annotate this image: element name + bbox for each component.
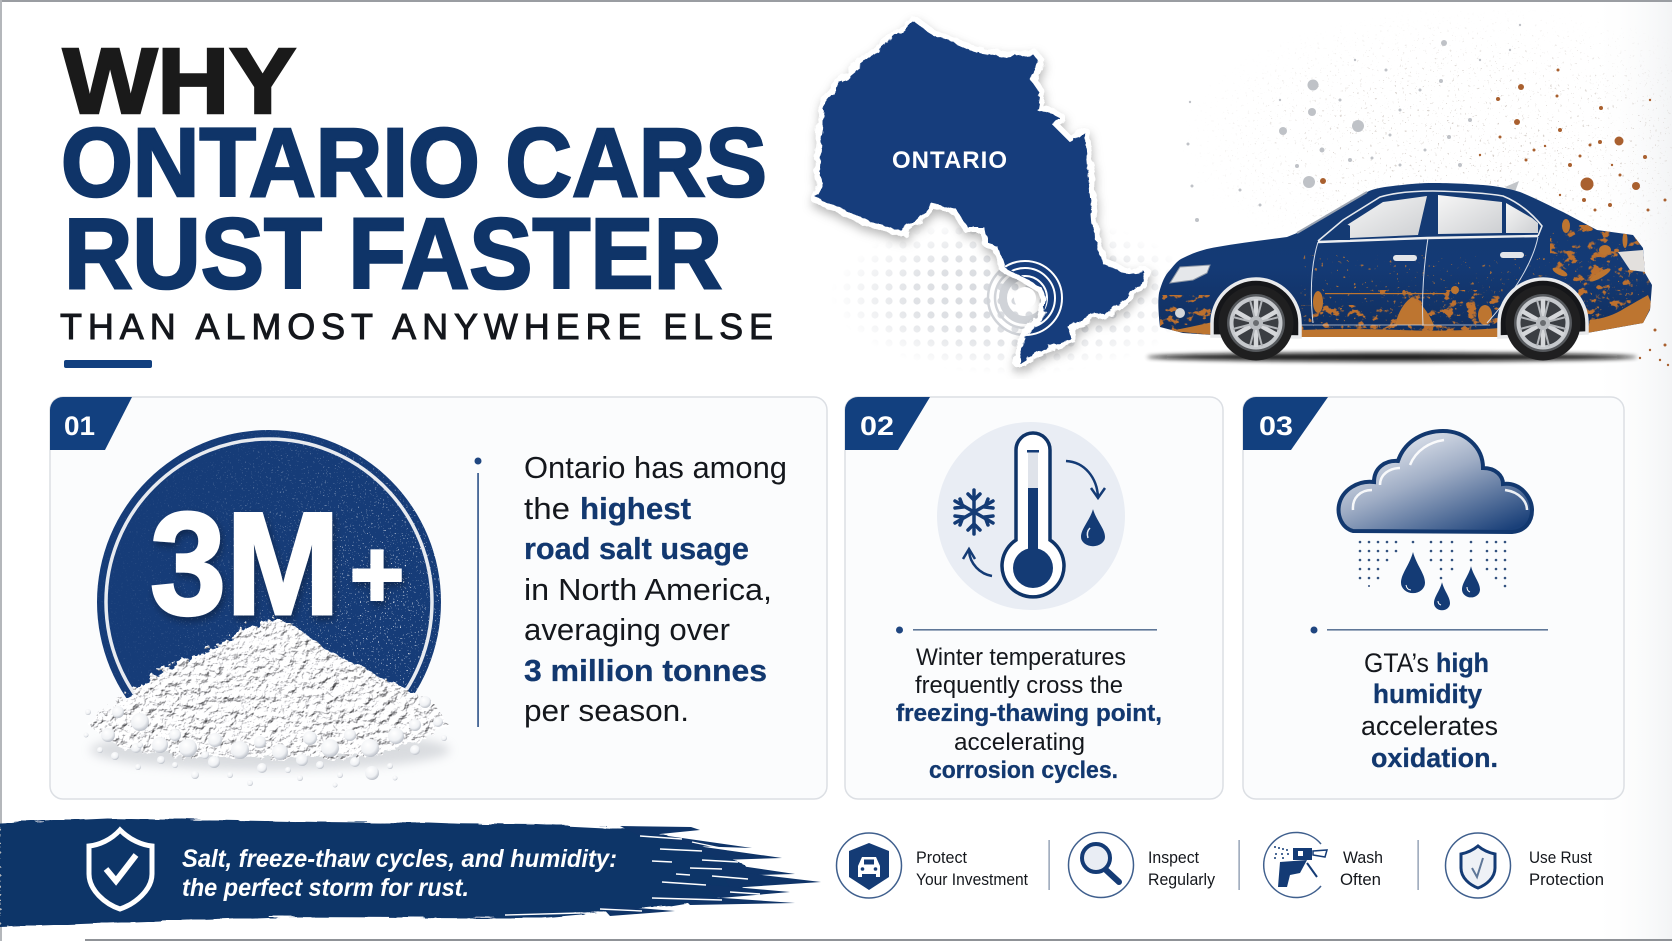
panel 01 text: the	[524, 491, 570, 526]
panel card	[845, 397, 1223, 799]
number badge 02: 02	[860, 411, 894, 441]
panel 01 text: averaging over	[524, 612, 730, 647]
tip: protect your investment: Protect	[916, 848, 967, 867]
title line: why: WHY	[63, 29, 296, 133]
door seams	[1300, 237, 1538, 325]
cycle arrow up	[963, 549, 992, 576]
shield check icon	[89, 830, 152, 909]
panel 03 text: accelerates	[1361, 711, 1498, 741]
rust patches	[1160, 219, 1655, 340]
paint and rust splatter	[1180, 10, 1672, 366]
tip: wash often: Often	[1340, 870, 1381, 889]
panel 01 text: per season.	[524, 693, 689, 728]
panel 03 text	[1361, 648, 1498, 773]
cycle arrow down	[1066, 461, 1105, 498]
panel 02 text: freezing-thawing point,	[896, 700, 1162, 727]
tip: inspect regularly: Regularly	[1148, 870, 1215, 889]
panel 03 text: humidity	[1373, 679, 1482, 709]
panel 01 text: road salt usage	[524, 531, 749, 566]
tip: inspect regularly	[1068, 832, 1215, 898]
tip: protect your investment: Your Investment	[916, 870, 1028, 889]
door handles	[1393, 252, 1524, 261]
tip: use rust protection: Protection	[1529, 870, 1604, 889]
3M+ statistic: 3M	[150, 482, 340, 645]
panel 02 text: frequently cross the	[915, 672, 1123, 699]
banner text: the perfect storm for rust.	[182, 874, 469, 902]
tip: wash often: Wash	[1343, 848, 1383, 867]
map of ontario	[817, 22, 1144, 362]
map label: ONTARIO	[892, 147, 1007, 174]
headlight	[1170, 265, 1210, 283]
panel 03 text: high	[1436, 648, 1489, 678]
tip: use rust protection	[1446, 833, 1604, 898]
divider	[474, 458, 482, 727]
ground shadow	[1147, 352, 1637, 362]
panel 02 text	[896, 644, 1162, 784]
location ripple over map	[1004, 260, 1063, 336]
title line: ontario cars: ONTARIO CARS	[61, 108, 767, 217]
panel 01 text: 3 million tonnes	[524, 653, 767, 688]
water drop	[1081, 509, 1105, 546]
banner text	[182, 845, 617, 902]
subtitle: THAN ALMOST ANYWHERE ELSE	[60, 306, 773, 347]
fog light	[1175, 308, 1185, 318]
3M+ statistic: +	[350, 521, 404, 628]
panel 03: humidity	[1243, 397, 1624, 799]
number badge 01	[50, 397, 132, 450]
province shape	[817, 22, 1144, 362]
rain cloud icon	[1339, 431, 1532, 610]
panel card	[1243, 397, 1624, 799]
title	[61, 29, 767, 310]
tips row	[836, 832, 1604, 898]
number badge 03: 03	[1259, 411, 1293, 441]
panel 02 text: Winter temperatures	[916, 644, 1126, 671]
location ripple under map	[988, 261, 1062, 335]
number badge 03	[1243, 397, 1328, 450]
rain drops	[1401, 552, 1425, 593]
divider	[1310, 626, 1548, 634]
location dot	[1014, 287, 1036, 309]
rear wheel	[1506, 286, 1580, 360]
salt pile	[84, 618, 450, 788]
title accent bar	[64, 360, 152, 368]
car body	[1158, 183, 1652, 337]
panel 01 text: highest	[580, 491, 691, 526]
brush shape	[0, 818, 821, 927]
banner text: Salt, freeze-thaw cycles, and humidity:	[182, 845, 617, 873]
brush stroke banner	[0, 818, 821, 927]
panel card	[50, 397, 827, 799]
divider	[896, 626, 1157, 634]
panel 01 text: Ontario has among	[524, 450, 787, 485]
tip: use rust protection: Use Rust	[1529, 848, 1592, 867]
front wheel	[1218, 286, 1294, 360]
halftone backdrop	[858, 230, 1168, 360]
antenna	[1505, 181, 1519, 192]
panel 01 text: in North America,	[524, 572, 772, 607]
snowflake	[955, 490, 993, 534]
title line: rust faster: RUST FASTER	[64, 198, 722, 310]
panel 02 text: accelerating	[954, 729, 1085, 756]
wheel arches	[1212, 279, 1587, 337]
number badge 02	[845, 397, 930, 450]
panel 02: freeze-thaw	[845, 397, 1223, 799]
tip: protect your investment	[836, 833, 1028, 898]
tail light	[1618, 250, 1645, 272]
panel 03 text: GTA’s	[1364, 648, 1429, 678]
panel 01 text	[524, 450, 787, 728]
thermometer icon	[937, 422, 1125, 610]
panel 01: road salt	[50, 397, 827, 799]
panel 03 text: oxidation.	[1371, 743, 1498, 773]
rusty car	[1147, 181, 1655, 362]
tip: wash often	[1264, 832, 1383, 898]
3M+ circle	[97, 430, 441, 698]
panel 02 text: corrosion cycles.	[929, 757, 1118, 784]
number badge 01: 01	[64, 411, 95, 441]
windows	[1297, 191, 1542, 242]
tip: inspect regularly: Inspect	[1148, 848, 1199, 867]
mist dots	[1359, 541, 1506, 587]
